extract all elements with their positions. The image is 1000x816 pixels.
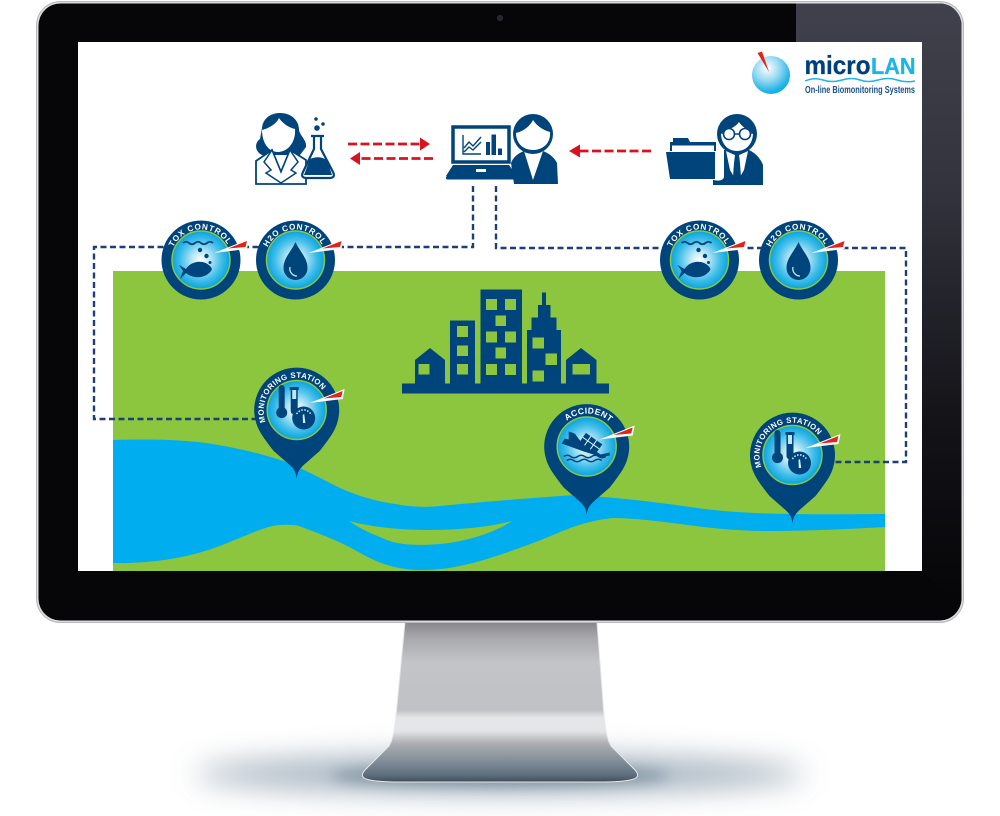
bar chart bbox=[486, 142, 490, 155]
badge: Tox control right: TOX CONTROL bbox=[666, 224, 729, 246]
logo: microLAN bbox=[752, 50, 916, 96]
map pin: monitoring station left: MONITORING STATION bbox=[258, 372, 326, 423]
badge: H2O control left bbox=[256, 220, 342, 300]
icon: manager with folder bbox=[666, 114, 763, 185]
logo wordmark: micro bbox=[804, 50, 870, 80]
badge: Tox control left: TOX CONTROL bbox=[168, 224, 230, 246]
map pin: monitoring station right: MONITORING STATION bbox=[754, 417, 822, 468]
badge: Tox control right bbox=[660, 220, 746, 300]
map pin: accident: ACCIDENT bbox=[566, 408, 614, 421]
line chart bbox=[463, 135, 481, 154]
icon: fish bbox=[678, 242, 712, 279]
logo: microLAN: LAN bbox=[871, 53, 916, 79]
icon: fish bbox=[179, 242, 213, 279]
webcam bbox=[498, 16, 502, 20]
analyst bbox=[511, 114, 558, 184]
icon: city skyline bbox=[402, 290, 609, 394]
folder bbox=[666, 138, 716, 179]
laptop bbox=[446, 127, 519, 180]
dashed connection lines bbox=[94, 186, 906, 462]
icon: sinking ship bbox=[562, 432, 610, 462]
badge: H2O control left: H2O CONTROL bbox=[262, 224, 325, 247]
arrow: manager to analyst bbox=[569, 144, 651, 158]
screen bbox=[78, 42, 922, 571]
arrow: analyst to scientist bbox=[350, 152, 433, 165]
green landscape bbox=[113, 271, 885, 571]
logo tagline: On-line Biomonitoring Systems bbox=[805, 84, 915, 96]
monitor stand bbox=[362, 622, 638, 782]
icon: water drop bbox=[284, 242, 308, 280]
icon: analyst at laptop bbox=[446, 114, 558, 184]
flask bbox=[302, 136, 334, 178]
map pin: monitoring station left bbox=[254, 368, 345, 478]
map pin: accident bbox=[544, 404, 635, 515]
icon: thermometers and gauge bbox=[276, 385, 315, 430]
badge: H2O control right: H2O CONTROL bbox=[766, 224, 828, 247]
logo ball bbox=[752, 56, 790, 94]
badge: Tox control left bbox=[162, 220, 248, 300]
desk shadow bbox=[195, 756, 805, 792]
manager bbox=[713, 114, 763, 185]
logo needle bbox=[758, 52, 769, 72]
badge: H2O control right bbox=[759, 220, 845, 300]
monitor bezel bbox=[36, 2, 964, 622]
river bbox=[113, 439, 885, 570]
arrow: scientist to analyst bbox=[348, 138, 430, 150]
icon: water drop bbox=[786, 242, 810, 280]
icon: thermometers and gauge bbox=[772, 430, 811, 474]
map pin: monitoring station right bbox=[750, 412, 840, 524]
icon: scientist with flask bbox=[256, 113, 334, 184]
